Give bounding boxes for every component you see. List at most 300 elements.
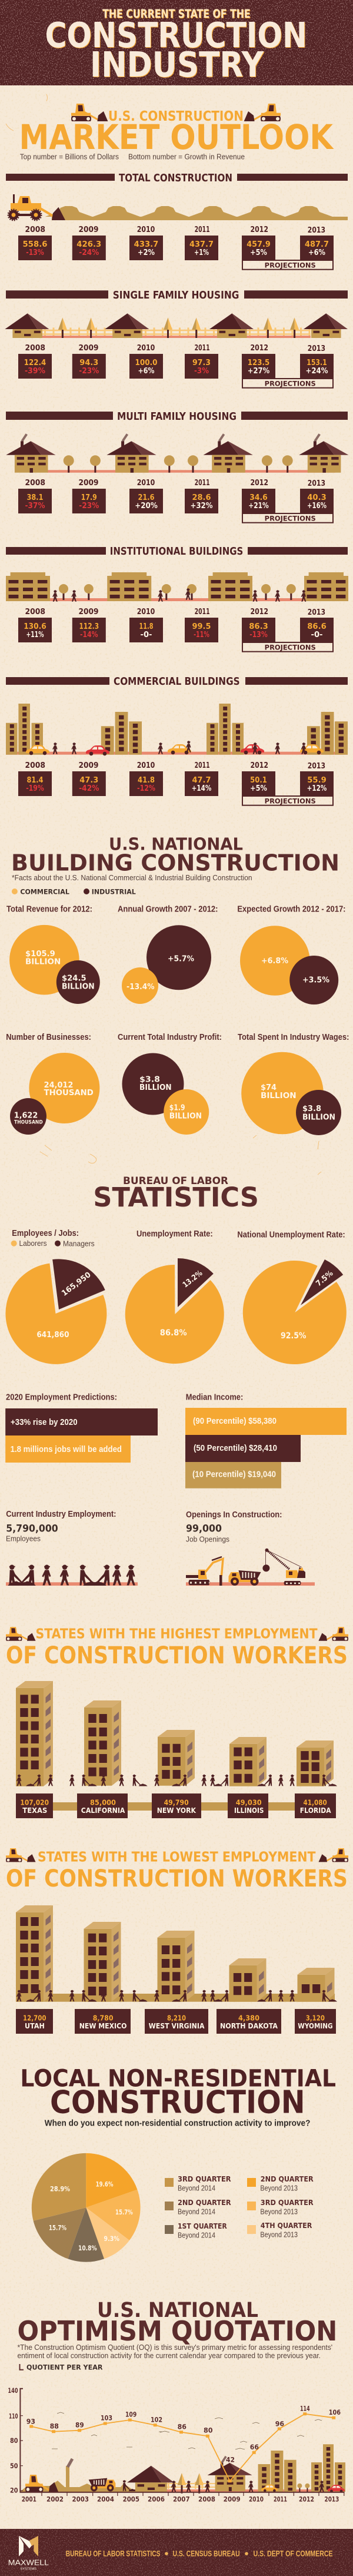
chart: number of businesses: THOUSAND (44, 1088, 94, 1098)
tile: 2009 (72, 761, 106, 796)
projections box (242, 260, 333, 270)
chart: national unemployment rate pie (237, 1230, 347, 1364)
tile: 2008: 81.4 (27, 775, 44, 785)
chart: total revenue for 2012: BILLION (25, 957, 61, 967)
panel: commercial buildings (6, 675, 348, 805)
chart: total spent in industry wages: BILLION (302, 1112, 335, 1122)
tile: 2008 (18, 478, 52, 513)
tile: 2008: 2008 (25, 607, 45, 616)
tile: 2011 (185, 607, 218, 642)
heading: U.S. construction market outlook: U.S. CONSTRUCTION (108, 108, 244, 124)
note: building construction facts: *Facts about the U.S. National Commercial & Industrial Building Construction (12, 873, 252, 882)
state: Texas (16, 1793, 53, 1818)
scene: excavator, dump truck and crane (186, 1549, 315, 1586)
chart: employees and jobs pie (5, 1229, 106, 1364)
chart: total spent in industry wages: $3.8 (302, 1104, 321, 1113)
scene: institutional blocks, trees and pedestrians (6, 572, 348, 602)
labels: lowest employment states (16, 2009, 336, 2034)
legend: quarters: Beyond 2014 (178, 2231, 215, 2240)
axes: 50 (10, 2462, 18, 2470)
scene: city towers, cars and pedestrians (6, 704, 348, 755)
tile: 2009: -24% (79, 248, 99, 257)
heading: Bureau of Labor Statistics: BUREAU OF LABOR (123, 1175, 228, 1186)
tile: 2010: 2010 (137, 225, 155, 234)
stat: openings in construction: Job Openings (186, 1535, 229, 1544)
state: Texas: TEXAS (22, 1806, 47, 1815)
scene: construction timeline behind chart (20, 2412, 345, 2494)
chart: total revenue for 2012: BILLION (62, 982, 95, 991)
chart: number of businesses: THOUSAND (14, 1119, 43, 1125)
section heading: TOTAL CONSTRUCTION (119, 172, 232, 184)
legend: quarters: 2ND QUARTER (261, 2175, 314, 2184)
building: Illinois (229, 1737, 267, 1786)
building: West Virginia (158, 1931, 194, 2002)
icon: bulldozer left (71, 104, 108, 121)
tile: 2011: 47.7 (192, 775, 211, 785)
state: North Dakota (217, 2009, 281, 2034)
tile: 2012: 2012 (251, 225, 268, 234)
tile: 2013: -0- (311, 630, 322, 639)
tile: 2010: -0- (140, 630, 152, 639)
line series with markers: 106 (329, 2408, 341, 2416)
projections box: PROJECTIONS (265, 643, 316, 651)
workers along base (16, 1990, 337, 2002)
tile: 2008: 122.4 (24, 358, 46, 367)
tile: 2010: 2010 (137, 478, 155, 488)
tile: 2009: -42% (79, 784, 99, 793)
tile: 2009: 112.3 (79, 622, 99, 631)
section heading (6, 172, 348, 184)
tile: 2011 (185, 761, 218, 796)
tile: 2012 (242, 761, 275, 796)
line series with markers: 93 (26, 2418, 35, 2426)
state: Wyoming: WYOMING (298, 2022, 333, 2030)
tile: 2011: +14% (192, 784, 212, 793)
chart: national unemployment rate pie: 7.5% (314, 1269, 335, 1288)
state: West Virginia: 8,210 (167, 2014, 186, 2022)
tile: 2010: 41.8 (138, 775, 155, 785)
heading: U.S. national optimism quotation: OPTIMISM QUOTATION (18, 2315, 337, 2347)
tile: 2010: 21.6 (138, 493, 154, 502)
tile: 2012: 2012 (251, 478, 268, 488)
legend: quarters: Beyond 2014 (178, 2207, 215, 2216)
chart: quarter expectation pie: 9.3% (104, 2234, 119, 2243)
tile: 2008: -13% (26, 248, 44, 257)
tile: 2010: -12% (137, 784, 155, 793)
tile: 2011: 2011 (195, 225, 210, 234)
tile: 2009 (72, 607, 106, 642)
icon: bulldozer right (318, 1848, 348, 1862)
tile: 2012: 2012 (251, 761, 268, 770)
line series with markers: 96 (275, 2419, 284, 2428)
tile: 2012: -13% (249, 630, 268, 639)
tile: 2011: 2011 (195, 343, 210, 353)
tile: 2011: 2011 (195, 761, 210, 770)
tile: 2013: 2013 (308, 608, 325, 617)
logo: Maxwell Systems: SYSTEMS (20, 2568, 36, 2571)
chart: current total industry profit (118, 1033, 222, 1135)
chart: number of businesses (6, 1033, 99, 1135)
tile: 2011: 2011 (195, 478, 210, 488)
state: Wyoming: 3,120 (306, 2014, 325, 2022)
tile: 2010: +20% (135, 501, 158, 510)
tile: 2012 (242, 607, 275, 642)
bars: 2020 employment predictions: 2020 Employment Predictions: (6, 1393, 117, 1403)
section heading: COMMERCIAL BUILDINGS (114, 675, 240, 688)
projections box (242, 796, 333, 805)
bars: median income: (90 Percentile) $58,380 (193, 1417, 277, 1426)
chart: employees and jobs pie: Employees / Jobs: (12, 1229, 79, 1238)
data tiles (18, 225, 334, 270)
section heading: SINGLE FAMILY HOUSING (113, 289, 239, 301)
building: New York (158, 1730, 195, 1786)
tile: 2011: 437.7 (189, 240, 214, 249)
tile: 2012: 86.3 (249, 622, 268, 631)
line series with markers: 42 (226, 2455, 235, 2464)
axes: 2011 (274, 2495, 287, 2503)
legend: quarters: Beyond 2013 (260, 2207, 298, 2216)
tile: 2011: 97.3 (192, 358, 211, 367)
axes: 2003 (72, 2495, 89, 2503)
tile: 2010: 11.8 (139, 622, 153, 631)
chart: quarter expectation pie (32, 2153, 141, 2262)
chart: quarter expectation pie: 10.8% (78, 2244, 97, 2252)
tile: 2010: +6% (138, 366, 155, 376)
chart: national unemployment rate pie: 92.5% (281, 1331, 307, 1341)
chart: number of businesses: Number of Businesses: (6, 1033, 91, 1042)
tile: 2013: +6% (308, 248, 325, 257)
tile: 2013: 86.6 (307, 622, 327, 631)
tile: 2012: +5% (250, 248, 267, 257)
data tiles (18, 478, 334, 523)
state: Illinois: 49,030 (236, 1799, 262, 1807)
panel: institutional buildings (6, 545, 348, 652)
title: THE CURRENT STATE OF THE (102, 7, 251, 21)
tile: 2010: 100.0 (135, 358, 158, 367)
heading: states with the highest employment: STATES WITH THE HIGHEST EMPLOYMENT (35, 1627, 318, 1642)
tile: 2012: 2012 (251, 607, 268, 616)
building: Florida (297, 1740, 334, 1786)
axes: 2008 (198, 2495, 215, 2503)
chart: expected growth 2012 to 2017: +6.8% (261, 956, 288, 966)
stat: current industry employment: 5,790,000 (6, 1523, 58, 1534)
icon: bulldozer right (318, 1627, 348, 1641)
projections box: PROJECTIONS (265, 261, 316, 269)
tile: 2008: 130.6 (24, 622, 46, 631)
tile: 2013: 2013 (308, 479, 325, 488)
chart: unemployment rate pie: 86.8% (160, 1328, 187, 1338)
tile: 2010 (129, 607, 163, 642)
tile: 2012 (242, 225, 275, 260)
tile: 2012: 50.1 (250, 775, 267, 785)
tile: 2011: 2011 (195, 607, 210, 616)
tile: 2011 (185, 478, 218, 513)
chart: expected growth 2012 to 2017: +3.5% (302, 975, 329, 984)
axes: 20 (10, 2486, 18, 2494)
tile: 2013: 2013 (308, 344, 325, 353)
legend: quarters: Beyond 2013 (260, 2184, 298, 2193)
axes (8, 2386, 344, 2503)
state: New Mexico (75, 2009, 131, 2034)
chart: annual growth 2007 to 2012: Annual Growth 2007 - 2012: (118, 905, 218, 914)
legend: quarters: 2ND QUARTER (178, 2199, 231, 2207)
bars: median income: (10 Percentile) $19,040 (192, 1470, 276, 1480)
heading: states with the highest employment (6, 1627, 348, 1669)
scene: apartment houses and trees (6, 434, 348, 473)
state: Florida: 41,080 (304, 1799, 327, 1807)
building: Texas (16, 1681, 53, 1786)
tile: 2009: 2009 (79, 225, 99, 234)
line series with markers (26, 2404, 341, 2482)
line series with markers: 86 (178, 2422, 187, 2431)
state: California: CALIFORNIA (81, 1806, 125, 1815)
stat: openings in construction: 99,000 (186, 1523, 222, 1534)
bars: 2020 employment predictions (5, 1393, 158, 1463)
heading: local non-residential construction: LOCAL NON-RESIDENTIAL (20, 2065, 336, 2092)
stat: current industry employment: Current Industry Employment: (6, 1510, 116, 1519)
chart: total revenue for 2012: $105.9 (25, 949, 55, 959)
tile: 2008: -19% (26, 784, 44, 793)
tile: 2011 (185, 343, 218, 379)
chart: expected growth 2012 to 2017 (237, 905, 346, 1004)
heading: U.S. national building construction (11, 834, 339, 876)
tile: 2010: 433.7 (134, 240, 158, 249)
line series with markers: 80 (204, 2426, 213, 2434)
tile: 2009: -14% (80, 630, 98, 639)
chart: unemployment rate pie: 13.2% (181, 1269, 204, 1289)
building: Utah (16, 1905, 53, 2002)
sources: U.S. DEPT OF COMMERCE (253, 2550, 333, 2558)
state: New Mexico: NEW MEXICO (79, 2022, 127, 2030)
section heading (6, 410, 348, 423)
tile: 2009: -23% (79, 366, 99, 376)
tile: 2009 (72, 343, 106, 379)
line series with markers: 66 (250, 2443, 259, 2451)
tile: 2009: 2009 (79, 607, 99, 616)
logo: Maxwell Systems: MAXWELL (8, 2558, 49, 2567)
legend: quarters: 3RD QUARTER (261, 2199, 314, 2207)
axes: 2004 (97, 2495, 114, 2503)
chart: optimism quotient line chart (8, 2386, 345, 2503)
chart: total revenue for 2012 (6, 905, 100, 1004)
note: optimism quotient definition: entiment of local construction activity for the current calendar year compared to the previous year. (18, 2351, 321, 2360)
building: Wyoming (298, 1968, 334, 2002)
state: New York: NEW YORK (157, 1806, 197, 1815)
building: California (84, 1700, 121, 1786)
chart: current total industry profit: $1.9 (169, 1103, 185, 1113)
state: West Virginia (145, 2009, 208, 2034)
tile: 2012: 457.9 (247, 240, 271, 249)
state: Wyoming (295, 2009, 336, 2034)
axes: 80 (10, 2436, 18, 2445)
heading: Bureau of Labor Statistics: STATISTICS (93, 1182, 259, 1213)
tile: 2009: 17.9 (81, 493, 97, 502)
tile: 2013 (300, 344, 334, 379)
tile: 2008: -37% (25, 501, 45, 510)
line series with markers: 89 (75, 2421, 84, 2429)
tile: 2011 (185, 225, 218, 260)
workers along base (16, 1775, 337, 1786)
chart: employees and jobs pie: Laborers (19, 1239, 47, 1248)
projections box: PROJECTIONS (265, 514, 316, 522)
legend: commercial and industrial (12, 887, 136, 896)
tile: 2010: +2% (138, 248, 155, 257)
axes: 2013 (325, 2495, 339, 2503)
bars: median income: Median Income: (186, 1393, 243, 1403)
heading: local non-residential construction: CONSTRUCTION (50, 2083, 305, 2120)
tile: 2011: 99.5 (192, 622, 211, 631)
tile: 2010: 2010 (137, 607, 155, 616)
tile: 2012: +27% (248, 366, 269, 376)
legend: quotient per year: QUOTIENT PER YEAR (26, 2363, 102, 2371)
tile: 2011: +32% (191, 501, 213, 510)
state: New York (152, 1793, 201, 1818)
tile: 2012 (242, 343, 275, 379)
sources: U.S. CENSUS BUREAU (173, 2550, 240, 2558)
labels: highest employment states (16, 1793, 336, 1818)
tile: 2011: -3% (194, 366, 209, 376)
line series with markers: 114 (300, 2404, 310, 2412)
heading: U.S. national optimism quotation: U.S. NATIONAL (97, 2299, 258, 2322)
line series with markers: 88 (50, 2422, 59, 2430)
tile: 2009: 47.3 (79, 775, 98, 785)
projections box: PROJECTIONS (265, 797, 316, 805)
header banner (0, 0, 353, 85)
tile: 2012: +5% (250, 784, 267, 793)
tile: 2013: 40.3 (307, 493, 327, 502)
chart: number of businesses: 24,012 (44, 1080, 73, 1090)
section heading (6, 675, 348, 688)
axes: 140 (8, 2386, 18, 2395)
tile: 2013 (300, 226, 334, 260)
state: California: 85,000 (90, 1799, 116, 1807)
tile: 2008: 2008 (25, 225, 45, 234)
tile: 2008 (18, 761, 52, 796)
data tiles (18, 761, 334, 805)
tile: 2009: 94.3 (79, 358, 98, 367)
state: New York: 49,790 (164, 1799, 189, 1807)
chart: buildings for lowest employment states (16, 1905, 337, 2002)
tile: 2012: +21% (248, 501, 269, 510)
projections box (242, 642, 333, 652)
sources (66, 2550, 333, 2558)
bars: median income (185, 1393, 347, 1488)
heading: local non-residential construction (20, 2065, 336, 2120)
tile: 2009: -23% (79, 501, 99, 510)
title: INDUSTRY (90, 44, 264, 85)
projections box: PROJECTIONS (265, 379, 316, 387)
tile: 2008 (18, 343, 52, 379)
tile: 2013 (300, 761, 334, 796)
tile: 2010 (129, 225, 163, 260)
tile: 2009: 426.3 (76, 240, 101, 249)
sources: BUREAU OF LABOR STATISTICS (66, 2550, 160, 2558)
chart: total revenue for 2012: Total Revenue for 2012: (6, 905, 92, 914)
tile: 2010 (129, 343, 163, 379)
tile: 2008 (18, 607, 52, 642)
stat: current industry employment (6, 1510, 138, 1586)
note: optimism quotient definition (18, 2343, 332, 2360)
legend: commercial and industrial: COMMERCIAL (20, 887, 69, 896)
section heading: INSTITUTIONAL BUILDINGS (110, 545, 243, 558)
tile: 2010 (129, 761, 163, 796)
bars: 2020 employment predictions: +33% rise by 2020 (11, 1418, 78, 1427)
note: optimism quotient definition: *The Construction Optimism Quotient (OQ) is this survey's primary metric for assessing respondents' (18, 2343, 332, 2352)
heading: states with the lowest employment: STATES WITH THE LOWEST EMPLOYMENT (38, 1850, 316, 1865)
chart: employees and jobs pie: 165,950 (60, 1271, 93, 1298)
tile: 2008: 2008 (25, 343, 45, 353)
scene: houses and fence (5, 313, 348, 338)
chart: quarter expectation pie: 15.7% (49, 2223, 66, 2232)
legend: quarters: Beyond 2013 (260, 2230, 298, 2239)
axes: 2012 (299, 2495, 314, 2503)
tile: 2008: +11% (26, 630, 44, 639)
tile: 2010 (129, 478, 163, 513)
logo: Maxwell Systems (8, 2536, 49, 2571)
line series with markers: 103 (101, 2414, 112, 2422)
legend: quarters: 3RD QUARTER (178, 2175, 231, 2184)
icon: bulldozer right (244, 104, 281, 121)
tile: 2009: 2009 (79, 761, 99, 770)
tile: 2008: 2008 (25, 478, 45, 488)
tile: 2008: -39% (25, 366, 45, 376)
tile: 2011: +1% (194, 248, 209, 257)
tile: 2012 (242, 478, 275, 513)
chart: current total industry profit: BILLION (169, 1111, 202, 1120)
tile: 2013: +16% (307, 501, 327, 510)
title (45, 7, 307, 85)
data tiles (18, 343, 334, 388)
tile: 2013 (300, 479, 334, 513)
stat: openings in construction (186, 1510, 315, 1586)
tile: 2011: -11% (194, 630, 209, 639)
legend note: Top number = Billions of Dollars (20, 152, 119, 161)
legend note (20, 152, 245, 161)
state: Illinois (228, 1793, 268, 1818)
state: West Virginia: WEST VIRGINIA (149, 2022, 205, 2030)
panel: total construction (6, 172, 348, 270)
axes: 110 (9, 2412, 18, 2421)
panel: single family housing (5, 289, 348, 388)
line series with markers: 102 (151, 2415, 162, 2424)
tile: 2010: 2010 (137, 343, 155, 353)
title: CONSTRUCTION (45, 15, 307, 55)
chart: employees and jobs pie: 641,860 (36, 1330, 69, 1340)
building: New Mexico (84, 1922, 121, 2002)
chart: quarter expectation pie: 28.9% (50, 2184, 70, 2193)
axes: 2005 (123, 2495, 139, 2503)
tile: 2013: +24% (306, 366, 328, 376)
legend: quarters: 4TH QUARTER (261, 2222, 312, 2230)
bars: median income: (50 Percentile) $28,410 (194, 1444, 277, 1453)
chart: total spent in industry wages (238, 1033, 349, 1135)
tile: 2013 (300, 608, 334, 642)
axes: 2002 (46, 2495, 64, 2503)
tile: 2013: 2013 (308, 761, 325, 771)
heading: states with the lowest employment (6, 1848, 348, 1892)
chart: quarter expectation pie: 15.7% (115, 2208, 133, 2216)
scene: bulldozer pushing dirt (8, 194, 348, 220)
state: New Mexico: 8,780 (93, 2014, 113, 2022)
chart: number of businesses: 1,622 (14, 1110, 38, 1120)
data tiles (18, 607, 334, 652)
chart: total spent in industry wages: $74 (261, 1083, 277, 1092)
axes: 2010 (249, 2495, 264, 2503)
chart: unemployment rate pie: Unemployment Rate: (136, 1229, 213, 1239)
tile: 2013: 153.1 (307, 358, 327, 367)
axes: 2006 (148, 2495, 165, 2503)
tile: 2008: 2008 (25, 761, 45, 770)
